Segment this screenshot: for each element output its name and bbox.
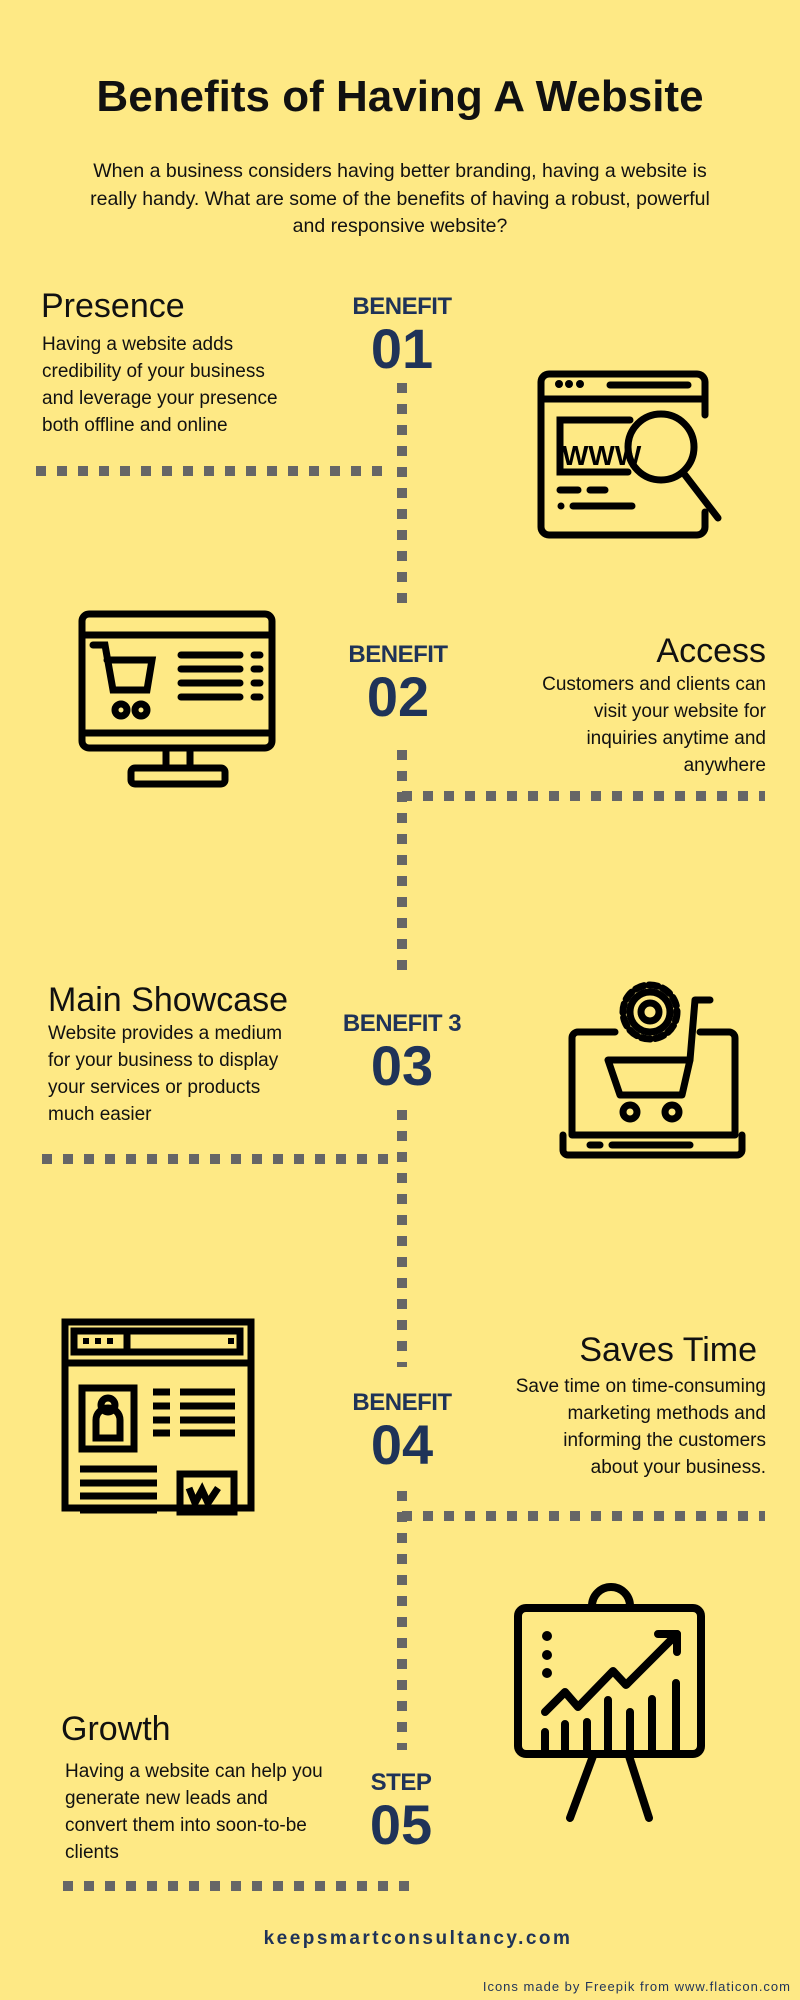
label: benefit 02: [348, 641, 448, 728]
text: presence: Having a website adds credibility of your business and leverage your presence both offline and online: [42, 334, 278, 436]
heading: Growth: Growth: [61, 1710, 171, 1748]
text: saves time: Save time on time-consuming marketing methods and informing the customers about your business.: [516, 1376, 766, 1478]
label: step 05: 05: [370, 1793, 432, 1856]
heading: Presence: Presence: [41, 287, 185, 325]
label: benefit 3: 03: [371, 1034, 433, 1097]
heading: Main Showcase: Main Showcase: [48, 981, 288, 1019]
heading: Access: Access: [656, 632, 766, 670]
label: benefit 04: [352, 1389, 452, 1476]
icon: profile web page: [65, 1322, 251, 1512]
icon: www browser search: [541, 374, 718, 535]
text: main showcase: Website provides a medium for your business to display your services or products much easier: [48, 1023, 282, 1125]
label: benefit 04: BENEFIT: [352, 1389, 452, 1416]
footer url: keepsmartconsultancy.com: [264, 1928, 572, 1949]
credit: Icons made by Freepik from www.flaticon.com: [483, 1979, 791, 1994]
text: growth: Having a website can help you generate new leads and convert them into soon-to-be clients: [65, 1761, 323, 1863]
label: benefit 02: 02: [367, 665, 429, 728]
title: Benefits of Having A Website: [96, 72, 704, 121]
label: benefit 04: 04: [371, 1413, 433, 1476]
icon: laptop cart gear: [563, 985, 742, 1155]
text: access: Customers and clients can visit your website for inquiries anytime and anywhere: [542, 674, 766, 776]
label: benefit 02: BENEFIT: [348, 641, 448, 668]
label: benefit 01: BENEFIT: [352, 293, 452, 320]
label: benefit 01: 01: [371, 317, 433, 380]
label: benefit 3: BENEFIT 3: [343, 1010, 461, 1037]
label: step 05: STEP: [371, 1769, 431, 1796]
icon: monitor with cart: [82, 614, 272, 784]
icon: www browser search: WWW: [562, 440, 642, 471]
intro text: When a business considers having better branding, having a website is really handy. What are some of the benefits of having a robust, powerful and responsive website?: [90, 160, 710, 237]
label: benefit 3: [343, 1010, 461, 1097]
icon: growth chart easel: [518, 1587, 701, 1818]
heading: Saves Time: Saves Time: [579, 1331, 757, 1369]
label: benefit 01: [352, 293, 452, 380]
